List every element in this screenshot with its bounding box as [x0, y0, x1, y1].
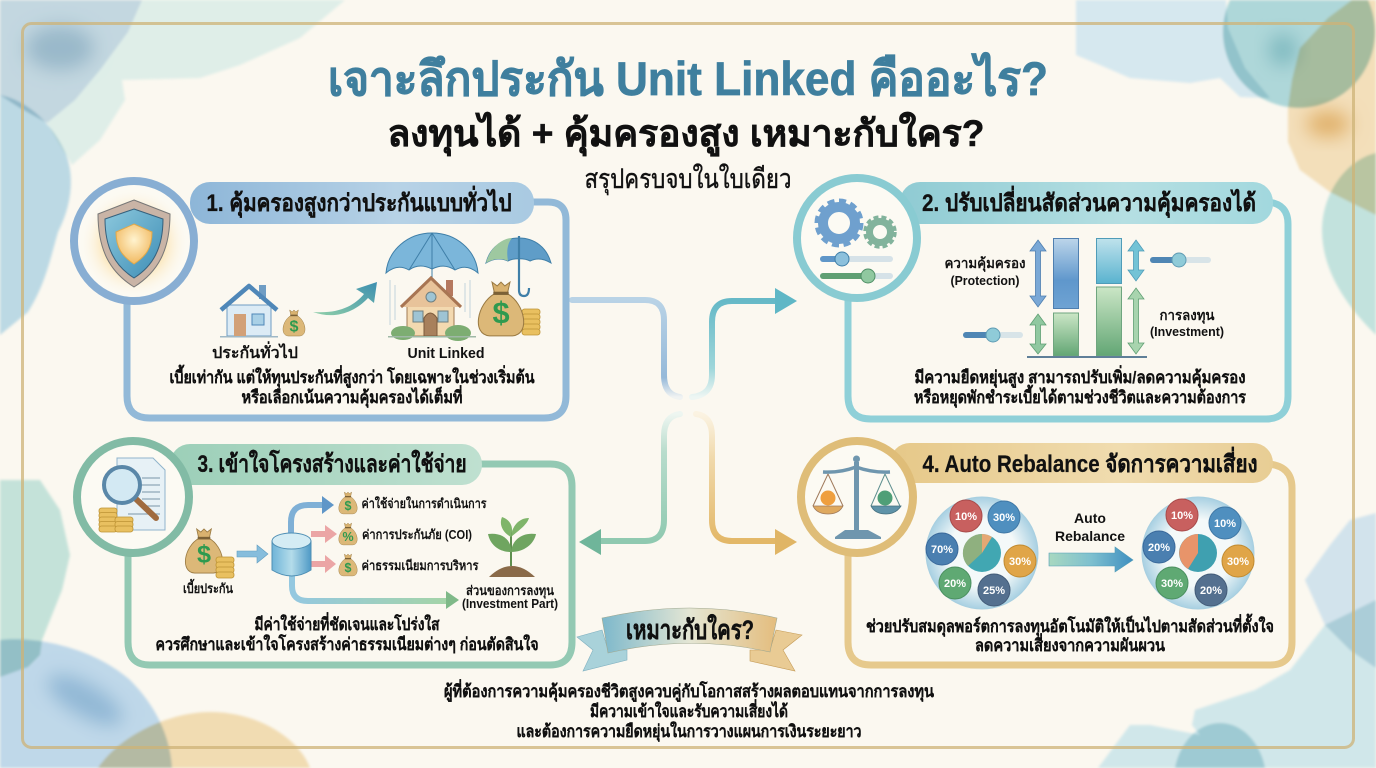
panel 4 description: ช่วยปรับสมดุลพอร์ตการลงทุนอัตโนมัติให้เป็นไปตามสัดส่วนที่ตั้งใจ: [866, 613, 1274, 637]
label: admin fee: ค่าธรรมเนียมการบริหาร: [362, 558, 479, 573]
icon: cost bags: $: [345, 561, 352, 575]
panel 4: auto rebalance: [801, 441, 1292, 665]
chart: portfolio before: 30%: [1009, 556, 1031, 568]
label: protection english: (Protection): [950, 273, 1020, 288]
ribbon main: [602, 608, 777, 653]
label: investment english: (Investment): [1150, 324, 1224, 339]
title: เจาะลึกประกัน Unit Linked คืออะไร?: [328, 51, 1048, 105]
arrow: to COI: [311, 525, 337, 543]
arrow: investment before: [1030, 314, 1046, 354]
icon: magnifier: [104, 467, 156, 518]
panel 3 description: มีค่าใช้จ่ายที่ชัดเจนและโปร่งใส: [254, 612, 440, 634]
label: protection: ความคุ้มครอง: [944, 255, 1026, 272]
icon: coins: [99, 508, 133, 532]
label: operating expense: ค่าใช้จ่ายในการดำเนินการ: [362, 495, 487, 511]
icon: cost bags: %: [342, 530, 354, 544]
panel 1 heading band: [190, 182, 534, 224]
label: investment part english: (Investment Part): [462, 596, 558, 611]
icon: balance scale: [813, 456, 901, 539]
arrow: to panel 3: [579, 414, 680, 555]
panel 3 heading: 3. เข้าใจโครงสร้างและค่าใช้จ่าย: [198, 449, 466, 478]
arrow: to panel 2: [692, 288, 797, 397]
icon: premium money bag: [185, 529, 223, 573]
icon: premium coins: [216, 557, 234, 578]
icon: large money bag: [478, 282, 524, 336]
icon: coins stack: [522, 309, 540, 335]
icon: large gear: [817, 201, 861, 245]
audience line 3: และต้องการความยืดหยุ่นในการวางแผนการเงินระยะยาว: [516, 721, 862, 742]
icon: large umbrella: [386, 233, 478, 325]
panel 1 heading: 1. คุ้มครองสูงกว่าประกันแบบทั่วไป: [206, 185, 512, 219]
label: Unit Linked: Unit Linked: [408, 345, 484, 362]
panel 3 heading band: [170, 444, 482, 485]
icon: plant: [488, 517, 536, 577]
chart: portfolio after: 20%: [1148, 542, 1170, 554]
label: investment: การลงทุน: [1160, 307, 1215, 324]
icon: large house: [388, 278, 476, 341]
icon: small money bag: [283, 310, 305, 336]
icon: slider blue: [820, 252, 893, 266]
panel 2 description: มีความยืดหยุ่นสูง สามารถปรับเพิ่ม/ลดความคุ้มครอง: [914, 365, 1246, 389]
panel 2 frame: [848, 202, 1288, 419]
panel 1 description line 2: หรือเลือกเน้นความคุ้มครองได้เต็มที่: [242, 385, 462, 408]
icon: slider right: [1150, 253, 1211, 267]
icon: large money bag: $: [492, 295, 510, 330]
panel 2 badge ring: [797, 178, 917, 298]
panel 4 heading band: [890, 443, 1273, 483]
label: premium: เบี้ยประกัน: [183, 578, 233, 596]
icon: small umbrella: [486, 236, 551, 296]
arrow: to investment part: [292, 575, 459, 609]
panel 2: adjustable ratio: [797, 178, 1288, 419]
chart: portfolio before: 25%: [983, 585, 1005, 597]
panel 4 heading: 4. Auto Rebalance จัดการความเสี่ยง: [922, 446, 1258, 478]
audience text: [444, 679, 934, 742]
audience line 1: ผู้ที่ต้องการความคุ้มครองชีวิตสูงควบคู่กับโอกาสสร้างผลตอบแทนจากการลงทุน: [444, 679, 934, 703]
label: rebalance: Rebalance: [1055, 528, 1125, 544]
chart: portfolio after: 10%: [1214, 518, 1236, 530]
icon: small house: [220, 285, 278, 338]
panel 1 badge ring: [74, 181, 194, 301]
arrow: to operating expense: [291, 496, 334, 535]
icon: cost bags: $: [345, 499, 352, 513]
panel 4 badge ring: [801, 441, 913, 553]
label: general insurance: ประกันทั่วไป: [212, 341, 298, 362]
ribbon: who is it for: [577, 608, 802, 671]
chart: portfolio after: 30%: [1161, 578, 1183, 590]
audience line 2: มีความเข้าใจและรับความเสี่ยงได้: [590, 699, 788, 721]
chart: portfolio before: 70%: [931, 544, 953, 556]
icon: small gear: [865, 217, 895, 247]
arrow: panel 1 connector: [572, 300, 680, 397]
connector arrows: [572, 288, 797, 555]
bar chart: protection vs investment: [1027, 238, 1147, 358]
panel 3 description line 2: ควรศึกษาและเข้าใจโครงสร้างค่าธรรมเนียมต่างๆ ก่อนตัดสินใจ: [156, 634, 538, 654]
icon: slider left: [963, 328, 1023, 342]
chart: portfolio after: 20%: [1200, 585, 1222, 597]
ribbon heading: เหมาะกับใคร?: [626, 614, 754, 645]
icon: document: [117, 458, 165, 530]
label: auto: Auto: [1074, 510, 1106, 526]
panel 1 description: เบี้ยเท่ากัน แต่ให้ทุนประกันที่สูงกว่า โดยเฉพาะในช่วงเริ่มต้น: [170, 364, 535, 389]
panel 3 badge ring: [77, 441, 189, 553]
tagline: สรุปครบจบในใบเดียว: [584, 163, 792, 196]
chart: portfolio after: [1142, 497, 1254, 609]
panel 3 frame: [128, 464, 572, 665]
label: investment part: ส่วนของการลงทุน: [466, 583, 554, 599]
arrow: growth: [313, 282, 377, 315]
chart: portfolio before: 10%: [955, 511, 977, 523]
arrow: protection after: [1128, 240, 1144, 281]
icon: shield: [79, 188, 189, 298]
panel 2 heading: 2. ปรับเปลี่ยนสัดส่วนความคุ้มครองได้: [922, 185, 1256, 219]
chart: portfolio before: 30%: [993, 512, 1015, 524]
icon: premium money bag: $: [197, 541, 211, 569]
ribbon right tail: [750, 630, 802, 671]
arrow: to panel 4: [696, 414, 797, 555]
panel 3: structure and costs: [77, 441, 572, 665]
arrow: premium to fund: [237, 545, 268, 563]
arrow: to admin fee: [311, 555, 336, 573]
icon: slider green: [820, 269, 893, 283]
panel 4 frame: [848, 464, 1292, 665]
icon: fund cylinder: [272, 533, 311, 576]
arrow: investment after: [1128, 288, 1144, 354]
ribbon left tail: [577, 630, 627, 671]
arrow: rebalance: [1049, 547, 1133, 572]
arrow: protection before: [1030, 240, 1046, 307]
chart: portfolio after: 10%: [1171, 510, 1193, 522]
icon: small money bag: $: [290, 318, 299, 336]
chart: portfolio before: [926, 497, 1038, 609]
icon: cost bags: [339, 492, 357, 576]
panel 2 heading band: [900, 182, 1273, 224]
panel 2 description line 2: หรือหยุดพักชำระเบี้ยได้ตามช่วงชีวิตและความต้องการ: [914, 384, 1247, 408]
panel 4 description line 2: ลดความเสี่ยงจากความผันผวน: [975, 633, 1165, 655]
label: COI: ค่าการประกันภัย (COI): [362, 527, 472, 542]
panel 1 frame: [127, 202, 566, 418]
panel 1: higher protection: [74, 181, 566, 418]
chart: portfolio before: 20%: [944, 578, 966, 590]
chart: portfolio after: 30%: [1227, 556, 1249, 568]
subtitle: ลงทุนได้ + คุ้มครองสูง เหมาะกับใคร?: [388, 111, 984, 157]
